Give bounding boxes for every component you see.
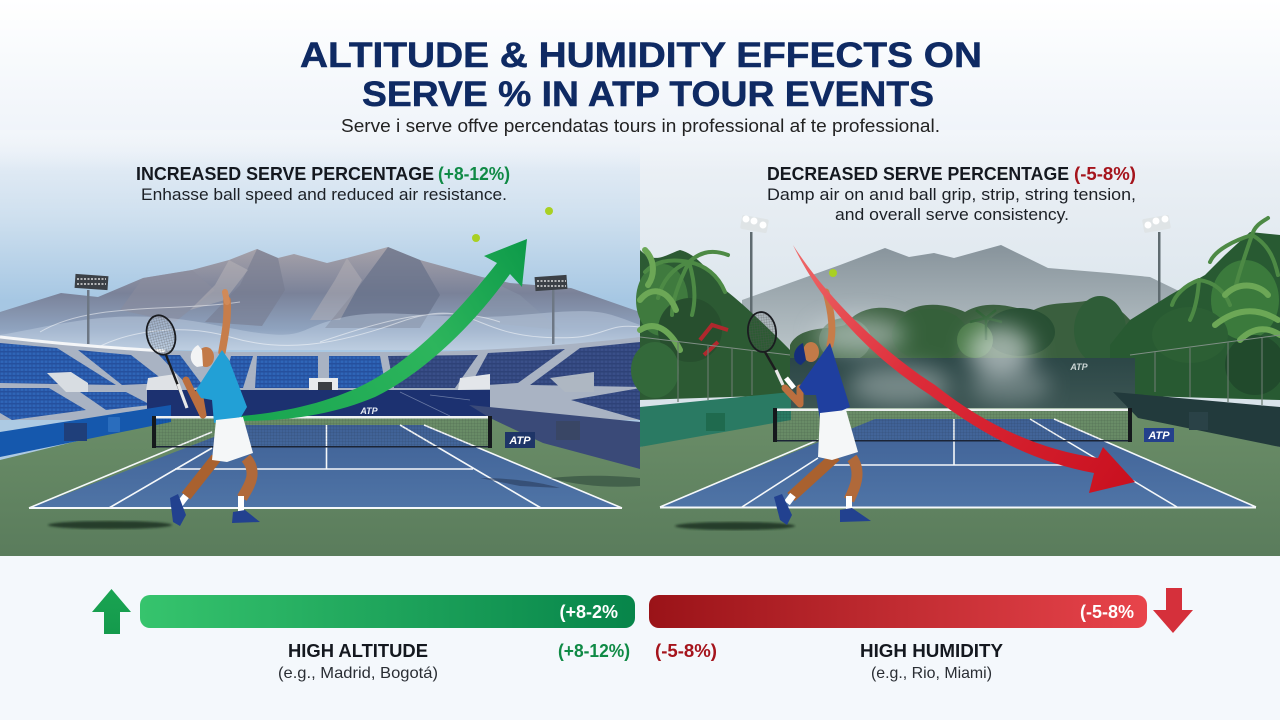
title: ALTITUDE & HUMIDITY EFFECTS ON <box>300 36 982 75</box>
side fences <box>640 335 1280 405</box>
tennis ball humid <box>829 269 837 277</box>
left panel description: Enhasse ball speed and reduced air resistance. <box>141 185 507 204</box>
panel: high humidity tropical scene <box>631 130 1280 556</box>
floodlight right <box>535 275 567 344</box>
floodlight left <box>75 274 108 344</box>
title <box>300 36 982 114</box>
ATP sign humid <box>1144 428 1174 442</box>
court surround: green ground <box>0 412 640 556</box>
tropical trees <box>631 218 1280 400</box>
green bar <box>140 595 635 628</box>
fog mist <box>815 317 1050 405</box>
icon: red down arrow <box>1153 588 1193 633</box>
ATP sign humid: ATP <box>1147 430 1170 442</box>
right panel description: and overall serve consistency. <box>835 205 1069 224</box>
tennis court <box>29 425 640 508</box>
floodlight left humid <box>740 215 769 332</box>
back wall <box>147 390 490 418</box>
tennis ball low <box>472 234 480 242</box>
subtitle: Serve i serve offve percendatas tours in professional af te professional. <box>341 116 940 136</box>
label: high altitude <box>278 641 438 682</box>
green up trajectory arrow <box>241 239 527 421</box>
server player left <box>48 292 260 529</box>
top fade over panels <box>0 130 1280 170</box>
label: high altitude: HIGH ALTITUDE <box>288 641 428 661</box>
right panel heading: (-5-8%) <box>1074 164 1136 184</box>
label: high humidity: HIGH HUMIDITY <box>860 641 1003 661</box>
label: high humidity <box>860 641 1003 682</box>
courtside chair right <box>556 421 580 440</box>
red bar: (-5-8% <box>1080 602 1134 622</box>
mountains <box>0 247 640 352</box>
centre tree line <box>790 296 1140 365</box>
bench left <box>706 413 725 431</box>
courtside chair left <box>64 417 120 441</box>
tennis net <box>152 416 492 448</box>
tennis ball high <box>545 207 553 215</box>
tennis net humid <box>773 408 1132 442</box>
bottom legend strip background <box>0 556 1280 720</box>
ATP sign: ATP <box>508 435 531 447</box>
red bar <box>649 595 1147 628</box>
left panel heading: (+8-12%) <box>438 164 510 184</box>
value: humidity change: (-5-8%) <box>655 641 717 661</box>
right navy side wall <box>469 405 640 469</box>
value: altitude change: (+8-12%) <box>558 641 630 661</box>
right panel heading: DECREASED SERVE PERCENTAGE <box>767 164 1069 184</box>
tennis court humid <box>660 419 1256 508</box>
dark back wall: ATP <box>1069 362 1089 372</box>
ATP sign <box>505 432 535 448</box>
label: high altitude: (e.g., Madrid, Bogotá) <box>278 665 438 682</box>
server player right <box>675 292 871 530</box>
dark side wall right <box>1113 392 1280 447</box>
panel: high altitude stadium scene <box>0 130 640 556</box>
left blue side wall <box>0 405 171 457</box>
floodlight right humid <box>1142 215 1171 322</box>
right panel description: Damp air on anıd ball grip, strip, string tension, <box>767 185 1136 204</box>
right foliage <box>1110 218 1280 400</box>
right panel description <box>767 185 1136 224</box>
left foliage <box>631 250 790 400</box>
red down trajectory arrow <box>793 245 1135 493</box>
left panel heading: INCREASED SERVE PERCENTAGE <box>136 164 434 184</box>
bench right <box>1189 412 1208 430</box>
title: SERVE % IN ATP TOUR EVENTS <box>362 75 934 114</box>
dark back wall <box>790 358 1135 408</box>
misty mountains <box>742 245 1183 350</box>
court surround green <box>640 408 1280 556</box>
label: high humidity: (e.g., Rio, Miami) <box>871 665 992 682</box>
green bar: (+8-2% <box>559 602 618 622</box>
stadium stands <box>0 337 640 420</box>
back wall: ATP <box>359 406 379 416</box>
green side wall <box>640 392 791 447</box>
icon: green up arrow <box>92 589 131 634</box>
